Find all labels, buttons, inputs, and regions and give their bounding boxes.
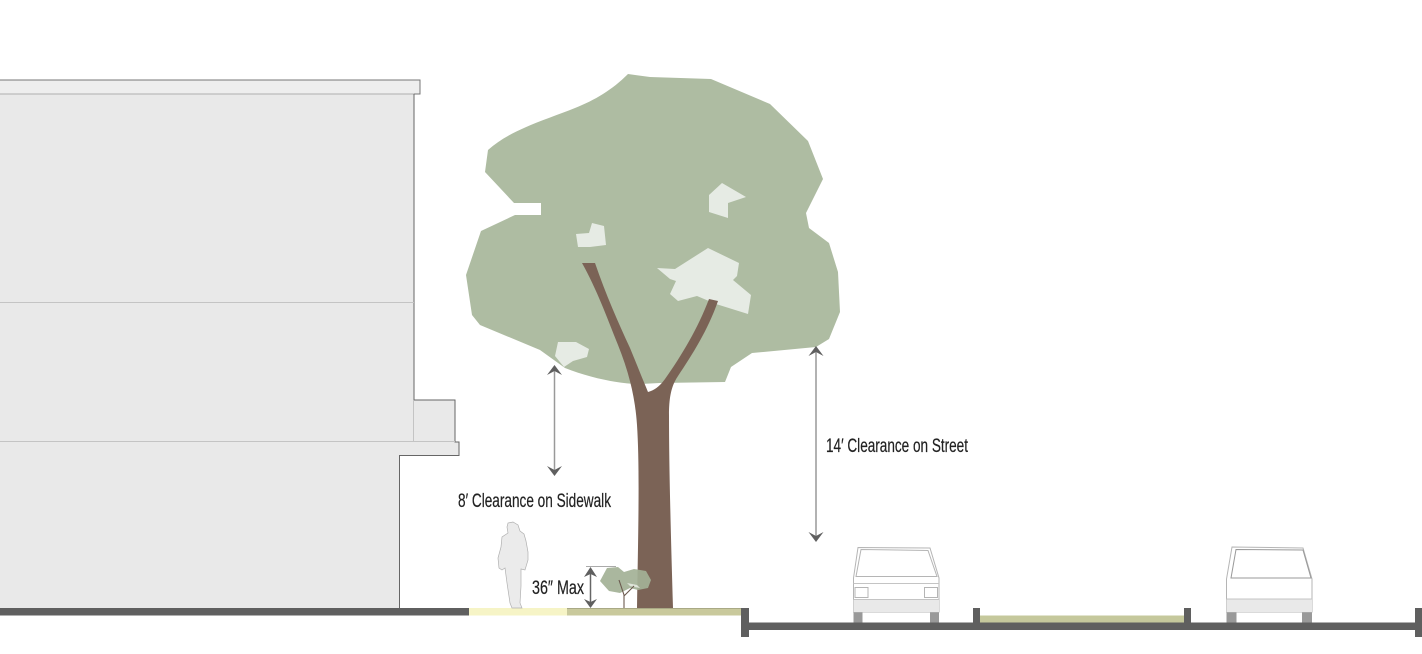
pedestrian silhouette bbox=[498, 522, 528, 608]
label: 8 ft clearance: 8′ Clearance on Sidewalk bbox=[458, 491, 611, 512]
small shrub bbox=[586, 566, 651, 608]
arrow: 36 inch max bbox=[584, 567, 597, 608]
car: right bbox=[1226, 547, 1312, 622]
arrow: 8 ft clearance on sidewalk bbox=[547, 365, 562, 476]
label: 14 ft clearance: 14′ Clearance on Street bbox=[826, 436, 969, 457]
street surface bbox=[749, 608, 1422, 637]
ground: sidewalk and planting strip bbox=[0, 608, 749, 637]
canopy gaps bbox=[555, 183, 751, 367]
building elevation bbox=[0, 80, 459, 608]
tree trunk bbox=[582, 263, 718, 608]
car: left bbox=[854, 548, 939, 622]
tree canopy bbox=[466, 74, 840, 384]
arrow: 14 ft clearance on street bbox=[808, 346, 824, 542]
label: 36 inch max: 36″ Max bbox=[532, 578, 584, 599]
